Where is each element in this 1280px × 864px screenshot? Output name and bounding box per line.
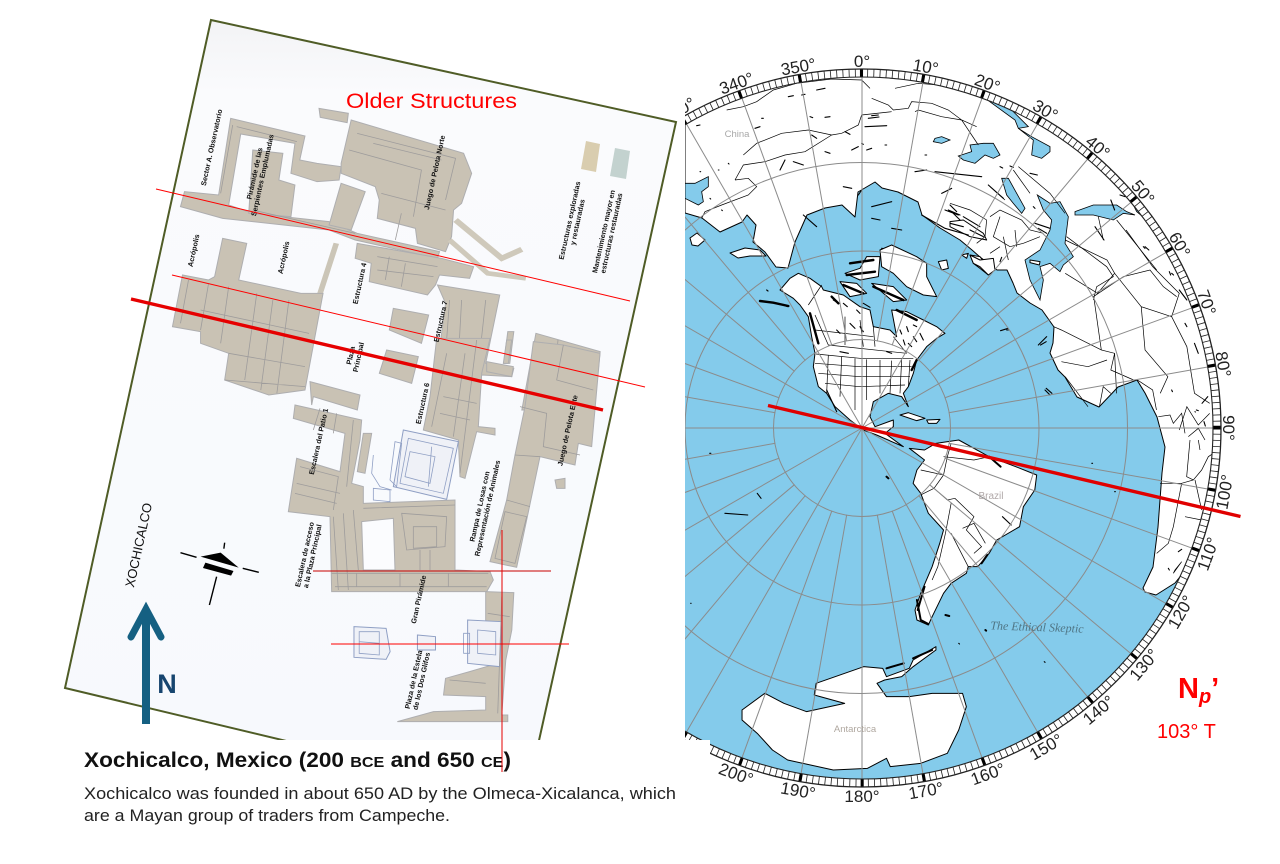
- degree labels: 190°: [779, 778, 817, 803]
- panel: azimuthal world map: [685, 56, 1234, 802]
- degree labels: 50°: [1127, 176, 1158, 208]
- plan labels: Escalera del Patio 1: [307, 408, 330, 475]
- site buildings, lower part: [354, 592, 514, 722]
- degree labels: 40°: [1082, 132, 1114, 163]
- callout: Np' pole label: ’: [1211, 673, 1219, 705]
- graticule: latitude rings and meridians: [685, 78, 1212, 778]
- plan labels: Serpientes Emplumadas: [249, 133, 276, 217]
- callout: Np' pole label: 103° T: [1157, 721, 1216, 743]
- callout: Np' pole label: [1157, 673, 1219, 743]
- degree labels: 120°: [1164, 592, 1198, 632]
- degree labels: 180°: [844, 787, 880, 806]
- degree labels: 150°: [1026, 730, 1066, 764]
- plan labels: Estructuras exploradas: [557, 180, 582, 260]
- degree labels: 350°: [779, 55, 817, 79]
- thin red alignment lines on plan: [156, 189, 645, 644]
- plan labels: Plaza: [344, 345, 357, 365]
- plan labels: Acrópolis: [276, 240, 291, 275]
- plan labels: Estructura 6: [414, 382, 431, 425]
- description: [84, 785, 676, 825]
- heading: Xochicalco, Mexico (200 BCE and 650 CE): [84, 749, 511, 772]
- degree labels: 90°: [1219, 415, 1238, 441]
- plan labels: a la Plaza Principal: [301, 524, 324, 589]
- white mask under plan for caption: [0, 740, 685, 864]
- description: are a Mayan group of traders from Campeche.: [84, 807, 450, 825]
- thick red line across map: [768, 406, 1240, 516]
- white mask at lower left of map: [685, 740, 710, 864]
- country labels on map: [725, 129, 1004, 735]
- callout: Np' pole label: N: [1178, 673, 1199, 705]
- map disk and landmasses: [685, 78, 1212, 778]
- legend swatches: [581, 141, 630, 179]
- degree labels: 200°: [716, 759, 756, 789]
- plan labels: Plaza de la Estela: [403, 648, 425, 710]
- degree labels: 30°: [1029, 96, 1061, 125]
- plan labels: Representación de Animales: [473, 459, 502, 557]
- plan labels: Principal: [351, 341, 366, 373]
- degree labels: 170°: [907, 778, 945, 803]
- plan labels: Estructura 7: [432, 300, 449, 343]
- degree labels: 140°: [1079, 692, 1118, 729]
- callout: Np' pole label: p: [1198, 686, 1211, 708]
- site buildings, upper part: [172, 108, 600, 410]
- plan labels: Mantenimiento mayor en: [590, 189, 617, 274]
- degree labels: 10°: [911, 55, 940, 79]
- degree labels: 330°: [659, 94, 699, 128]
- plan labels: Estructura 4: [351, 262, 368, 305]
- plan labels: Pirámide de las: [245, 147, 265, 200]
- vertical red line: [501, 530, 503, 772]
- north label: N: [157, 669, 177, 699]
- degree labels: 100°: [1212, 473, 1237, 511]
- degree labels: 130°: [1126, 645, 1163, 684]
- degree labels: 160°: [968, 759, 1008, 789]
- inland seas and gulfs: [950, 93, 1177, 300]
- plan labels: Juego de Pelota Este: [555, 394, 580, 467]
- watermark: The Ethical Skeptic: [990, 618, 1085, 636]
- site buildings, central part: [288, 338, 600, 592]
- plan labels: estructuras restauradas: [598, 192, 624, 274]
- degree labels: 110°: [1194, 535, 1223, 573]
- degree labels: 70°: [1193, 287, 1220, 318]
- plan labels: de los Dos Glifos: [411, 652, 432, 711]
- icon: site compass: [180, 543, 259, 605]
- degree labels: [659, 52, 1238, 806]
- site name: XOCHICALCO: [122, 501, 155, 589]
- plan labels: y restauradas: [568, 198, 587, 246]
- degree labels: 80°: [1211, 350, 1235, 379]
- icon: north arrow: [131, 609, 161, 724]
- degree labels: 0°: [854, 52, 870, 71]
- degree labels: 340°: [717, 69, 756, 99]
- Asia lines from the top sector: [685, 79, 982, 252]
- degree labels: 60°: [1165, 229, 1194, 261]
- plan labels: Juego de Pelota Norte: [422, 134, 447, 211]
- paper sheet: [65, 20, 676, 745]
- country labels on map: Brazil: [978, 491, 1004, 502]
- plan labels: [186, 108, 625, 711]
- plan labels: Acrópolis: [186, 233, 201, 268]
- North America, Greenland and Arctic islands: [760, 245, 1050, 447]
- plan labels: Gran Pirámide: [409, 575, 428, 624]
- thick red alignment line on plan: [131, 299, 603, 410]
- country labels on map: China: [725, 129, 750, 140]
- degree labels: 20°: [972, 70, 1003, 97]
- description: Xochicalco was founded in about 650 AD by the Olmeca-Xicalanca, which: [84, 785, 676, 803]
- graduated degree ring: [685, 68, 1222, 788]
- South America and Antarctica: [691, 440, 1115, 770]
- title: older structures: Older Structures: [346, 90, 517, 113]
- Africa and Middle East boundaries: [1001, 200, 1210, 430]
- plan labels: Rampa de Losas con: [468, 470, 492, 543]
- panel: Xochicalco site plan: [65, 20, 676, 745]
- plan labels: Escalera de acceso: [293, 521, 316, 588]
- country labels on map: Antarctica: [834, 724, 877, 735]
- plan labels: Sector A. Observatorio: [199, 108, 224, 187]
